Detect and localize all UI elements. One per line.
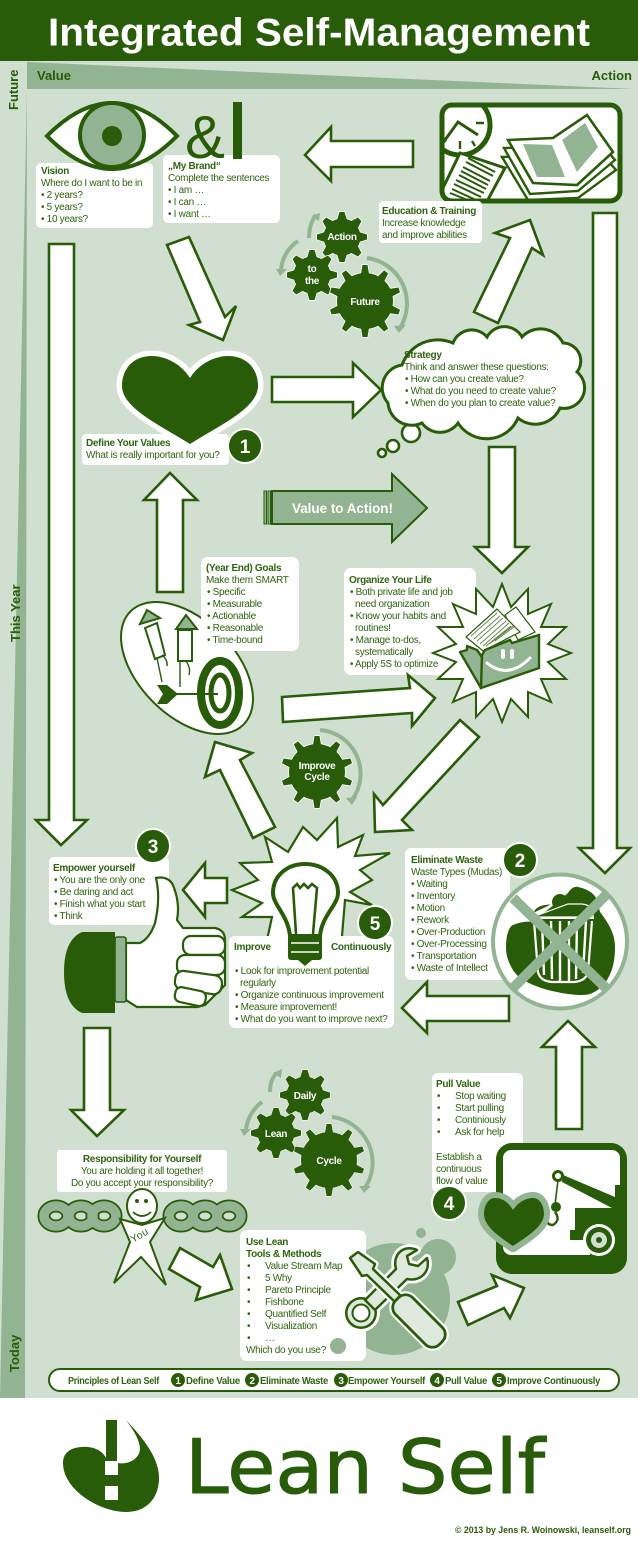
badge 2 [503,843,537,877]
improve continuously text box: • Organize continuous improvement [235,990,384,1001]
future to today axis wedge: Future [6,70,21,110]
badge 4: 4 [444,1194,455,1215]
gears: daily lean cycle: Daily [294,1091,317,1102]
legend: principles of lean self: 2 [249,1376,255,1387]
improve continuously text box: • What do you want to improve next? [235,1014,388,1025]
organize your life text box: • Apply 5S to optimize [350,659,439,670]
organize your life text box: routines! [355,623,391,634]
education and training text box: and improve abilities [382,230,467,241]
legend: principles of lean self: Principles of Lean Self [68,1376,160,1387]
empower yourself text box [49,857,169,925]
icon: rockets and target [96,577,278,759]
year end goals text box: • Measurable [207,599,263,610]
vision text box: • 10 years? [41,214,89,225]
thought cloud: strategy: • How can you create value? [405,374,525,385]
eliminate waste text box: • Over-Processing [411,939,487,950]
organize your life text box: Organize Your Life [349,575,432,586]
badge 5 [358,906,392,940]
badge 1 [228,429,262,463]
eliminate waste text box: Eliminate Waste [411,855,484,866]
value to action axis wedge: Value [37,68,71,83]
gears: daily lean cycle [240,1069,373,1196]
use lean tools text box: 5 Why [265,1273,292,1284]
improve continuously text box: Continuously [331,942,392,953]
responsibility text box: Do you accept your responsibility? [71,1178,214,1189]
arrow: goals to organize [282,675,435,726]
organize your life text box: • Both private life and job [350,587,453,598]
responsibility text box: You are holding it all together! [81,1166,203,1177]
gears: action to the future: Action [327,232,357,243]
use lean tools text box: Tools & Methods [246,1249,322,1260]
improve continuously text box: regularly [240,978,276,989]
organize your life text box: • Know your habits and [350,611,446,622]
vision text box: Vision [41,166,69,177]
badge 3: 3 [148,837,158,858]
use lean tools text box: Value Stream Map [265,1261,343,1272]
arrow: organize to eliminate [374,720,479,832]
education and training text box [379,201,482,243]
organize your life text box: • Manage to-dos, [350,635,421,646]
define your values text box: Define Your Values [86,438,171,449]
icon: tow truck pulling heart [484,1143,627,1274]
my brand text box: „My Brand“ [168,161,221,172]
icon: light bulb [273,864,338,966]
pull value text box: Start pulling [455,1103,504,1114]
arrow: value to action banner: Value to Action! [292,500,393,516]
pull value text box: flow of value [436,1176,488,1187]
gears: action to the future: to [308,264,317,275]
eliminate waste text box: • Inventory [411,891,455,902]
vision text box: Where do I want to be in [41,178,142,189]
arrow: improve to goals [205,742,275,838]
empower yourself text box: • Be daring and act [54,887,133,898]
responsibility text box: Responsibility for Yourself [83,1154,202,1165]
responsibility text box [57,1150,227,1192]
arrow: values to strategy [272,363,381,417]
empower yourself text box: • You are the only one [54,875,146,886]
thought cloud: strategy: Strategy [404,350,442,361]
year end goals text box: • Time-bound [207,635,262,646]
header band with title: Integrated Self-Management [48,12,590,54]
icon: thumbs up [64,877,225,1013]
future to today axis wedge: Today [7,1334,22,1372]
arrow: tools to truck [458,1275,524,1325]
legend: principles of lean self: Define Value [186,1376,241,1387]
arrow: training to vision [305,127,413,181]
use lean tools text box: Fishbone [265,1297,304,1308]
use lean tools text box: • [247,1297,251,1308]
my brand text box: • I want … [168,209,211,220]
use lean tools text box: Quantified Self [265,1309,327,1320]
eliminate waste text box: • Rework [411,915,450,926]
pull value text box: continuous [436,1164,482,1175]
eliminate waste text box: • Transportation [411,951,476,962]
pull value text box: • [437,1103,441,1114]
pull value text box: • [437,1127,441,1138]
icon: background blobs for tools [338,1228,456,1355]
my brand text box: • I am … [168,185,204,196]
define your values text box [82,434,229,465]
value to action axis wedge [27,62,635,89]
arrow: empower down [71,1028,124,1136]
gears: action to the future: Future [350,297,380,308]
year end goals text box: • Specific [207,587,246,598]
badge 3 [136,829,170,863]
arrow: goals to values [144,473,197,592]
use lean tools text box: • [247,1321,251,1332]
pull value text box: Continiously [455,1115,506,1126]
eliminate waste text box: • Waiting [411,879,448,890]
pull value text box: • [437,1115,441,1126]
empower yourself text box: • Finish what you start [54,899,146,910]
vision text box [36,163,153,228]
legend: principles of lean self: 4 [434,1376,440,1387]
improve continuously text box: • Measure improvement! [235,1002,337,1013]
education and training text box: Increase knowledge [382,218,466,229]
year end goals text box: (Year End) Goals [206,563,282,574]
eliminate waste text box: • Motion [411,903,445,914]
define your values text box: What is really important for you? [86,450,220,461]
badge 5: 5 [370,914,381,935]
arrow: eliminate to improve [402,982,509,1033]
arrow: brand to values [167,237,236,340]
legend: principles of lean self: Improve Continuously [507,1376,601,1387]
thought cloud: strategy [378,327,585,457]
arrow: pull to eliminate [542,1021,595,1129]
gears: action to the future: the [305,276,320,287]
value to action axis wedge: Action [592,68,632,83]
future to today axis wedge: This Year [8,584,23,642]
eliminate waste text box [405,848,510,980]
pull value text box: Ask for help [455,1127,505,1138]
thought cloud: strategy: • What do you need to create value? [405,386,557,397]
my brand text box: • I can … [168,197,206,208]
legend: principles of lean self: Empower Yourself [348,1376,426,1387]
pull value text box: Pull Value [436,1079,481,1090]
empower yourself text box: Empower yourself [53,863,136,874]
legend: principles of lean self: Pull Value [445,1376,488,1387]
logo: wordmark: Lean Self [185,1423,547,1511]
eliminate waste text box: • Waste of Intellect [411,963,488,974]
badge 1: 1 [240,437,251,458]
icon: ampersand and I [185,102,242,171]
my brand text box [163,155,280,223]
use lean tools text box: Pareto Principle [265,1285,332,1296]
pull value text box: • [437,1091,441,1102]
gears: action to the future [276,212,407,337]
long arrow: vision to empower [36,244,87,845]
header band with title [0,0,638,61]
year end goals text box: • Actionable [207,611,257,622]
gears: daily lean cycle: Lean [265,1129,287,1140]
icon: crossed wrench and screwdriver [342,1248,449,1351]
long arrow: training to eliminate [579,213,630,873]
icon: eye [47,103,177,169]
use lean tools text box: … [265,1333,275,1344]
organize your life text box: need organization [355,599,429,610]
use lean tools text box: • [247,1261,251,1272]
arrow: improve to empower [183,863,227,917]
pull value text box [432,1073,523,1192]
use lean tools text box: Which do you use? [246,1345,327,1356]
legend: principles of lean self: Eliminate Waste [260,1376,329,1387]
use lean tools text box: Use Lean [246,1237,288,1248]
icon: ampersand and I: & [185,104,225,171]
year end goals text box: • Reasonable [207,623,264,634]
thought cloud: strategy: Think and answer these questions: [404,362,549,373]
gear: improve cycle: Cycle [304,772,330,783]
legend: principles of lean self: 1 [175,1376,181,1387]
use lean tools text box [240,1230,366,1361]
arrow: responsibility to tools [169,1248,232,1300]
organize your life text box: systematically [355,647,413,658]
year end goals text box: Make them SMART [206,575,289,586]
pull value text box: Stop waiting [455,1091,506,1102]
badge 2: 2 [515,851,525,872]
improve continuously text box: Improve [234,942,272,953]
vision text box: • 5 years? [41,202,83,213]
use lean tools text box: • [247,1309,251,1320]
year end goals text box [201,557,299,651]
pull value text box: Establish a [436,1152,482,1163]
icon: person holding chains: You [128,1226,151,1246]
panel: clock, notes and books [440,102,622,204]
icon: burst with smiling folder [433,584,571,722]
icon: crossed out trash can [493,874,627,1008]
eliminate waste text box: Waste Types (Mudas) [411,867,502,878]
badge 4 [432,1186,466,1220]
legend: principles of lean self: 3 [338,1376,344,1387]
gear: improve cycle: Improve [299,761,336,772]
improve continuously text box [229,936,394,1028]
gears: daily lean cycle: Cycle [316,1156,342,1167]
icon: burst behind bulb [232,818,390,960]
organize your life text box [344,568,476,675]
logo: lean self mark [63,1420,159,1512]
vision text box: • 2 years? [41,190,83,201]
use lean tools text box: • [247,1273,251,1284]
use lean tools text box: Visualization [265,1321,317,1332]
improve continuously text box: • Look for improvement potential [235,966,369,977]
my brand text box: Complete the sentences [168,173,270,184]
thought cloud: strategy: • When do you plan to create value? [405,398,556,409]
arrow: training upward [474,220,543,323]
arrow: strategy to organize [475,447,528,573]
use lean tools text box: • [247,1333,251,1344]
arrow: value to action banner [264,474,427,542]
icon: heart [122,356,258,444]
gear: improve cycle [282,730,361,808]
education and training text box: Education & Training [382,206,476,217]
future to today axis wedge [0,70,27,1398]
icon: person holding chains [44,1189,241,1285]
empower yourself text box: • Think [54,911,84,922]
legend: principles of lean self [49,1369,619,1391]
eliminate waste text box: • Over-Production [411,927,485,938]
legend: principles of lean self: 5 [496,1376,502,1387]
use lean tools text box: • [247,1285,251,1296]
